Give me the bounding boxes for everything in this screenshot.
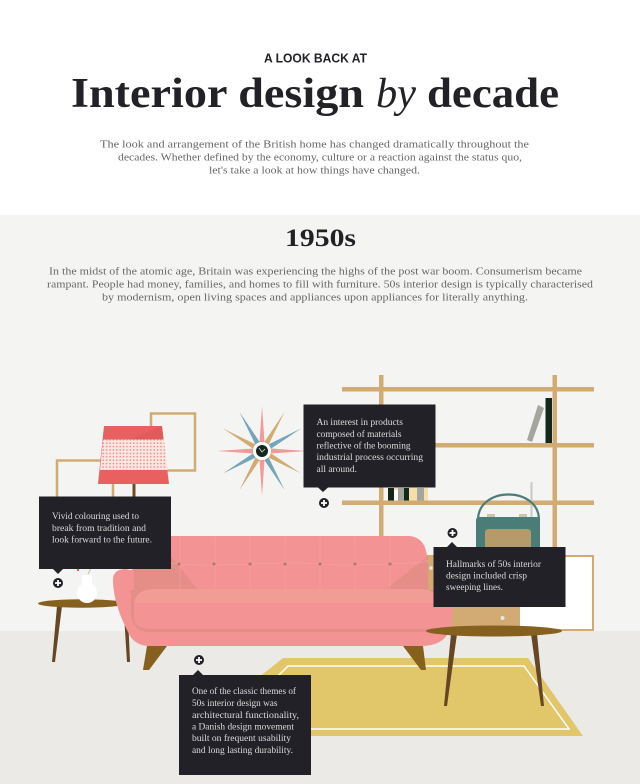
callout: sweeping lines: sweeping lines.: [446, 583, 503, 593]
callout: materials: [304, 404, 436, 492]
intro text: decades. Whether defined by the economy, culture or a reaction against the status quo,: [118, 152, 522, 164]
icon: plus marker: [53, 578, 63, 588]
callout: sweeping lines: design included crisp: [446, 572, 527, 582]
wall frames: [57, 414, 195, 500]
kicker heading: A LOOK BACK AT: [264, 52, 367, 66]
title: [71, 71, 559, 117]
callout: vivid colouring: break from tradition and: [52, 523, 146, 534]
callout: materials: An interest in products: [316, 418, 403, 428]
callout: vivid colouring: [39, 496, 171, 574]
callout: materials: composed of materials: [316, 429, 402, 440]
decade description: rampant. People had money, families, and homes to fill with furniture. 50s interior design is typically characterised: [47, 280, 594, 290]
callout: functionality: and long lasting durability.: [192, 746, 293, 756]
callout: functionality: built on frequent usability: [192, 733, 291, 744]
decade heading: 1950s: [285, 225, 356, 252]
intro text: [100, 140, 529, 176]
right side table: [426, 626, 562, 706]
icon: radio: [476, 482, 540, 553]
icon: white vase: [77, 568, 97, 603]
callout: functionality: 50s interior design was: [192, 699, 278, 709]
panel: room background: [0, 215, 640, 784]
shelving unit: [342, 375, 594, 555]
books on lower shelf: [388, 488, 428, 500]
icon: starburst clock: [217, 406, 307, 496]
icon: plus marker: [194, 655, 204, 665]
icon: floor lamp: [98, 426, 169, 500]
left side table: [38, 599, 130, 662]
rug: [178, 658, 583, 736]
sofa legs: [143, 646, 426, 670]
callout: vivid colouring: look forward to the future.: [52, 534, 152, 546]
icon: plus marker: [319, 498, 329, 508]
decade description: In the midst of the atomic age, Britain was experiencing the highs of the post war boom. Consumerism became: [49, 266, 582, 278]
callout: functionality: a Danish design movement: [192, 722, 294, 732]
intro text: The look and arrangement of the British home has changed dramatically throughout the: [100, 140, 529, 150]
callout: sweeping lines: Hallmarks of 50s interior: [446, 559, 542, 570]
callout: materials: reflective of the booming: [316, 440, 411, 452]
callout: sweeping lines: [434, 542, 566, 607]
books on top shelf: [527, 398, 552, 443]
callout: functionality: architectural functionality,: [192, 710, 299, 721]
callout: materials: industrial process occurring: [316, 453, 423, 463]
callout: functionality: One of the classic themes of: [192, 686, 297, 697]
callout: materials: all around.: [316, 465, 357, 475]
title: Interior design: [71, 71, 364, 117]
callout: vivid colouring: Vivid colouring used to: [52, 512, 139, 522]
title: decade: [427, 71, 559, 117]
intro text: let's take a look at how things have changed.: [209, 166, 420, 176]
decade description: [47, 266, 594, 304]
title: by: [376, 71, 416, 117]
icon: plus marker: [448, 528, 458, 538]
sofa: [113, 536, 453, 646]
callout: functionality: [179, 670, 311, 775]
cabinet: [426, 555, 593, 631]
decade description: by modernism, open living spaces and appliances upon appliances for literally anything.: [102, 292, 528, 304]
